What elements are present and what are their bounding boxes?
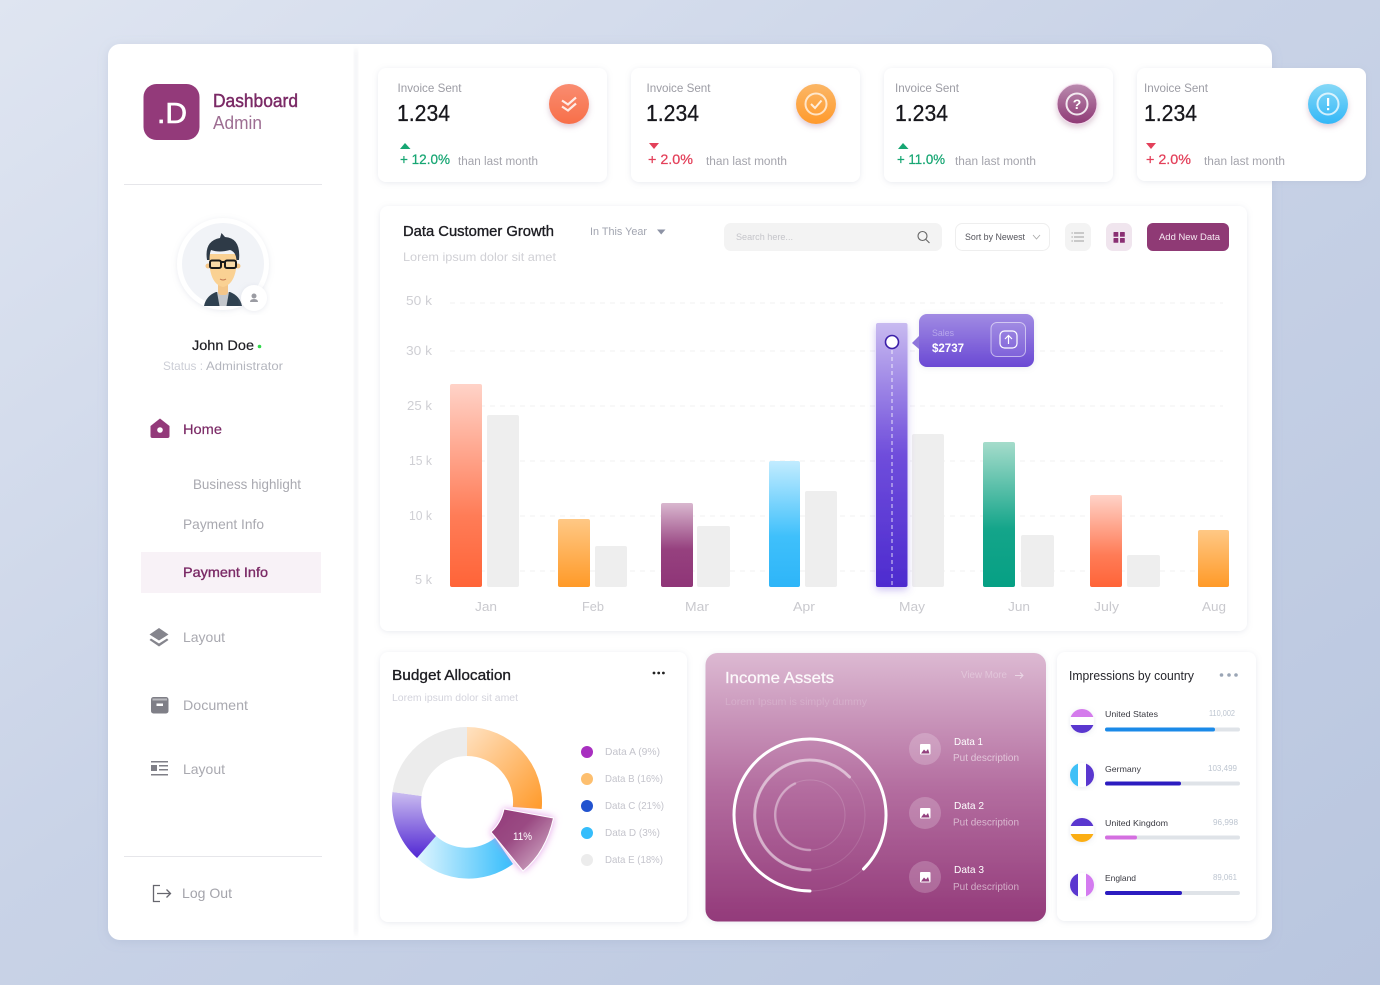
subheading: Lorem Ipsum is simply dummy — [725, 696, 868, 708]
stat card 2 — [631, 68, 860, 182]
legend: Data B (16%) — [605, 773, 663, 785]
grid view button — [1106, 223, 1132, 251]
search box — [724, 223, 942, 251]
icon: question — [1057, 84, 1097, 124]
menu: layout 2: Layout — [183, 761, 225, 777]
panel: budget allocation — [380, 652, 687, 922]
row: united states: United States — [1105, 709, 1158, 719]
row: united kingdom: 96,998 — [1213, 818, 1239, 827]
stat card 4 — [1137, 68, 1366, 181]
stat card 2: Invoice Sent — [646, 81, 711, 95]
donut chart — [392, 727, 554, 879]
stat card 3 — [884, 68, 1113, 182]
bar chart — [406, 294, 1229, 614]
heading: Impressions by country — [1069, 669, 1195, 683]
legend: Data C (21%) — [605, 800, 664, 812]
heading: Data Customer Growth — [403, 223, 554, 240]
stat card 4: 1.234 — [1144, 100, 1197, 126]
menu: layout — [150, 628, 225, 646]
row: united states: 110,002 — [1209, 709, 1236, 718]
sort dropdown: Sort by Newest — [965, 232, 1025, 242]
y axis labels: 5 k — [415, 573, 433, 587]
exploded segment — [491, 809, 554, 871]
y axis labels: 25 k — [407, 399, 433, 413]
icon: double check — [549, 84, 589, 124]
y axis labels: 10 k — [409, 509, 433, 523]
logo: Admin — [213, 113, 262, 133]
radial progress chart — [734, 739, 886, 891]
x axis labels: May — [899, 599, 926, 614]
panel: impressions by country — [1057, 652, 1256, 921]
stat card 4: than last month — [1204, 156, 1285, 168]
data 2: Put description — [953, 816, 1019, 828]
grey comparison bars — [487, 415, 1160, 587]
data 2 — [909, 797, 1019, 829]
user name and status — [163, 337, 283, 373]
menu: document: Document — [183, 697, 248, 713]
panel: data customer growth — [380, 206, 1247, 631]
row: germany: 103,499 — [1208, 764, 1238, 773]
heading: Income Assets — [725, 670, 834, 687]
data 3: Put description — [953, 881, 1019, 893]
x axis labels: July — [1094, 599, 1120, 614]
sort dropdown — [956, 224, 1050, 250]
legend: Data A (9%) — [605, 746, 660, 758]
logo — [144, 84, 298, 140]
highlighted may bar — [876, 323, 908, 587]
x axis labels: Feb — [582, 599, 604, 614]
data 2: Data 2 — [954, 800, 984, 812]
row: united kingdom — [1070, 818, 1240, 842]
y axis labels — [406, 294, 433, 587]
row: united kingdom: United Kingdom — [1105, 818, 1168, 828]
user name and status: Administrator — [206, 359, 283, 373]
menu: payment info: Payment Info — [183, 516, 264, 532]
subheading: Lorem ipsum dolor sit amet — [403, 250, 557, 264]
more menu — [653, 672, 665, 674]
y axis labels: 15 k — [409, 454, 433, 468]
legend — [581, 746, 664, 866]
coloured bars — [450, 384, 1229, 587]
menu: layout: Layout — [183, 629, 225, 645]
stat card 3: 1.234 — [895, 100, 948, 126]
main dashboard panel — [108, 44, 1272, 940]
row: germany — [1070, 763, 1240, 787]
stat card 2: 1.234 — [646, 100, 699, 126]
menu: payment info active — [141, 552, 321, 593]
menu: document — [151, 697, 248, 714]
user name and status: John Doe — [192, 337, 254, 353]
log out: Log Out — [182, 885, 232, 901]
legend: Data E (18%) — [605, 854, 663, 866]
add new data button: Add New Data — [1159, 232, 1221, 243]
x axis labels: Apr — [793, 599, 816, 614]
avatar — [177, 218, 269, 311]
logo: .D — [157, 98, 187, 130]
panel: income assets — [706, 653, 1046, 922]
view more link: View More — [961, 670, 1007, 681]
stat card 1 — [378, 68, 607, 182]
menu: home: Home — [183, 421, 222, 437]
menu: home — [150, 418, 222, 438]
icon: check circle — [796, 84, 836, 124]
y axis labels: 30 k — [406, 344, 433, 358]
row: united states — [1070, 709, 1240, 733]
menu: payment info active: Payment Info — [183, 564, 268, 580]
stat card 4: Invoice Sent — [1144, 81, 1209, 95]
more menu — [1220, 673, 1238, 677]
stat card 3: + 11.0% — [897, 151, 945, 167]
row: england: England — [1105, 873, 1136, 883]
stat card 1: + 12.0% — [400, 151, 450, 167]
menu: layout 2 — [151, 761, 225, 777]
exploded segment: 11% — [513, 831, 532, 843]
tooltip: sales: Sales — [932, 328, 954, 338]
search box: Search here... — [736, 232, 793, 242]
x axis labels: Mar — [685, 599, 710, 614]
tooltip: sales: $2737 — [932, 341, 964, 355]
stat card 1: Invoice Sent — [398, 81, 462, 95]
row: england: 89,061 — [1213, 873, 1238, 882]
row: england — [1070, 873, 1240, 897]
logo: Dashboard — [213, 91, 298, 111]
tooltip: sales — [912, 314, 1034, 367]
stat card 3: Invoice Sent — [895, 81, 960, 95]
subheading: Lorem ipsum dolor sit amet — [392, 693, 518, 704]
log out — [154, 885, 232, 902]
stat card 2: + 2.0% — [648, 151, 693, 167]
stat card 1: than last month — [458, 156, 538, 168]
legend: Data D (3%) — [605, 827, 660, 839]
x axis labels: Jun — [1008, 599, 1030, 614]
x axis labels — [475, 599, 1226, 614]
icon: alert — [1308, 84, 1348, 124]
stat card 4: + 2.0% — [1146, 151, 1191, 167]
period filter: In This Year — [590, 226, 647, 238]
stat card 1: 1.234 — [397, 100, 450, 126]
list view button — [1065, 223, 1091, 251]
y axis labels: 50 k — [406, 294, 433, 308]
x axis labels: Jan — [475, 599, 497, 614]
stat card 3: than last month — [955, 156, 1036, 168]
panel: sidebar — [124, 50, 358, 934]
x axis labels: Aug — [1202, 599, 1226, 614]
data 1: Data 1 — [954, 736, 983, 748]
stat card 2: than last month — [706, 156, 787, 168]
menu: business highlight: Business highlight — [193, 476, 301, 492]
data 3: Data 3 — [954, 864, 984, 876]
data 3 — [909, 861, 1019, 893]
add new data button — [1147, 223, 1229, 251]
heading: Budget Allocation — [392, 667, 511, 684]
user name and status: Status : — [163, 359, 203, 373]
row: germany: Germany — [1105, 764, 1142, 774]
icon: question: ? — [1073, 96, 1081, 112]
data 1 — [909, 733, 1019, 765]
data 1: Put description — [953, 752, 1019, 764]
